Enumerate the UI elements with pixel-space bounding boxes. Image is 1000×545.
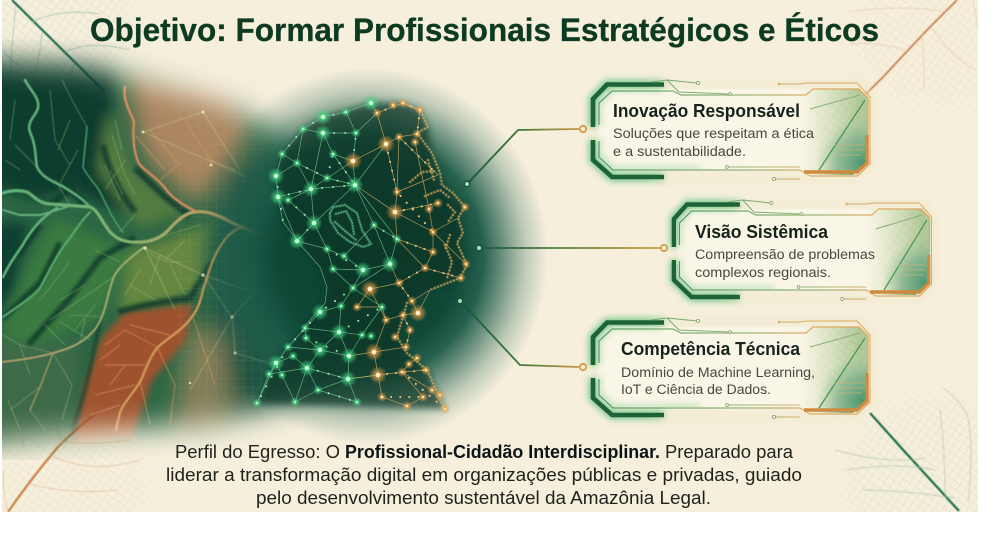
ear bbox=[330, 205, 371, 247]
panel: Visão Sistêmica bbox=[674, 200, 942, 303]
text block: Perfil do Egresso: Perfil do Egresso: O bbox=[175, 442, 340, 462]
network head profile bbox=[252, 94, 471, 414]
head silhouette bbox=[257, 103, 467, 409]
glowing green nodes bbox=[252, 94, 402, 408]
connector arrow: head to Competência Técnica bbox=[457, 298, 586, 370]
panel: Competência Técnica bbox=[593, 318, 881, 421]
leaf and river-vein illustration bbox=[0, 40, 350, 460]
text block: Perfil do Egresso: Preparado para bbox=[665, 442, 794, 462]
text: Visão Sistêmica description bbox=[695, 247, 875, 280]
connector arrow: head to Visão Sistêmica bbox=[476, 245, 667, 251]
text: Inovação Responsável description: Soluções que respeitam a ética bbox=[613, 126, 815, 141]
text: Visão Sistêmica description: complexos regionais. bbox=[695, 265, 831, 280]
glowing orange nodes bbox=[344, 98, 471, 414]
dark crevices bbox=[3, 145, 212, 430]
dark halo around the head bbox=[188, 68, 548, 444]
text: Inovação Responsável description: e a sustentabilidade. bbox=[613, 144, 746, 159]
text block: Perfil do Egresso bbox=[166, 442, 802, 508]
leaf: bottom left bbox=[2, 410, 140, 512]
main veins bbox=[3, 80, 282, 430]
text: Competência Técnica description: Domínio de Machine Learning, bbox=[621, 365, 815, 380]
small green dots along the mesh bbox=[257, 112, 397, 403]
leaf: top right bbox=[848, 0, 978, 94]
face profile dots bbox=[397, 103, 467, 409]
leaf: top left bbox=[2, 0, 130, 92]
text: Inovação Responsável description bbox=[613, 126, 815, 159]
heading: Inovação Responsável: Inovação Responsável bbox=[613, 101, 800, 121]
orange mesh bbox=[348, 103, 466, 409]
small orange dots along the mesh bbox=[377, 103, 461, 409]
title: Objetivo: Formar Profissionais Estratégicos e Éticos bbox=[90, 12, 879, 48]
text block: Perfil do Egresso: liderar a transformação digital em organizações públicas e privadas, guiado bbox=[166, 465, 802, 485]
leaf: bottom right bbox=[835, 388, 971, 511]
text: Competência Técnica description: IoT e Ciência de Dados. bbox=[621, 382, 771, 397]
text block: Perfil do Egresso: pelo desenvolvimento sustentável da Amazônia Legal. bbox=[256, 488, 711, 508]
digital grid overlay bbox=[175, 100, 265, 400]
heading: Competência Técnica: Competência Técnica bbox=[621, 339, 801, 359]
text block: Perfil do Egresso: Profissional-Cidadão Interdisciplinar. bbox=[345, 442, 660, 462]
colour base of the leaf bbox=[0, 40, 350, 460]
fine veins bbox=[3, 80, 200, 430]
connector arrow: head to Inovação Responsável bbox=[464, 126, 586, 187]
text: Visão Sistêmica description: Compreensão de problemas bbox=[695, 247, 875, 262]
digital network lines bbox=[143, 112, 275, 390]
heading: Visão Sistêmica: Visão Sistêmica bbox=[695, 222, 829, 242]
green mesh bbox=[257, 103, 397, 403]
text: Competência Técnica description bbox=[621, 365, 815, 397]
panel: Inovação Responsável bbox=[593, 80, 881, 183]
